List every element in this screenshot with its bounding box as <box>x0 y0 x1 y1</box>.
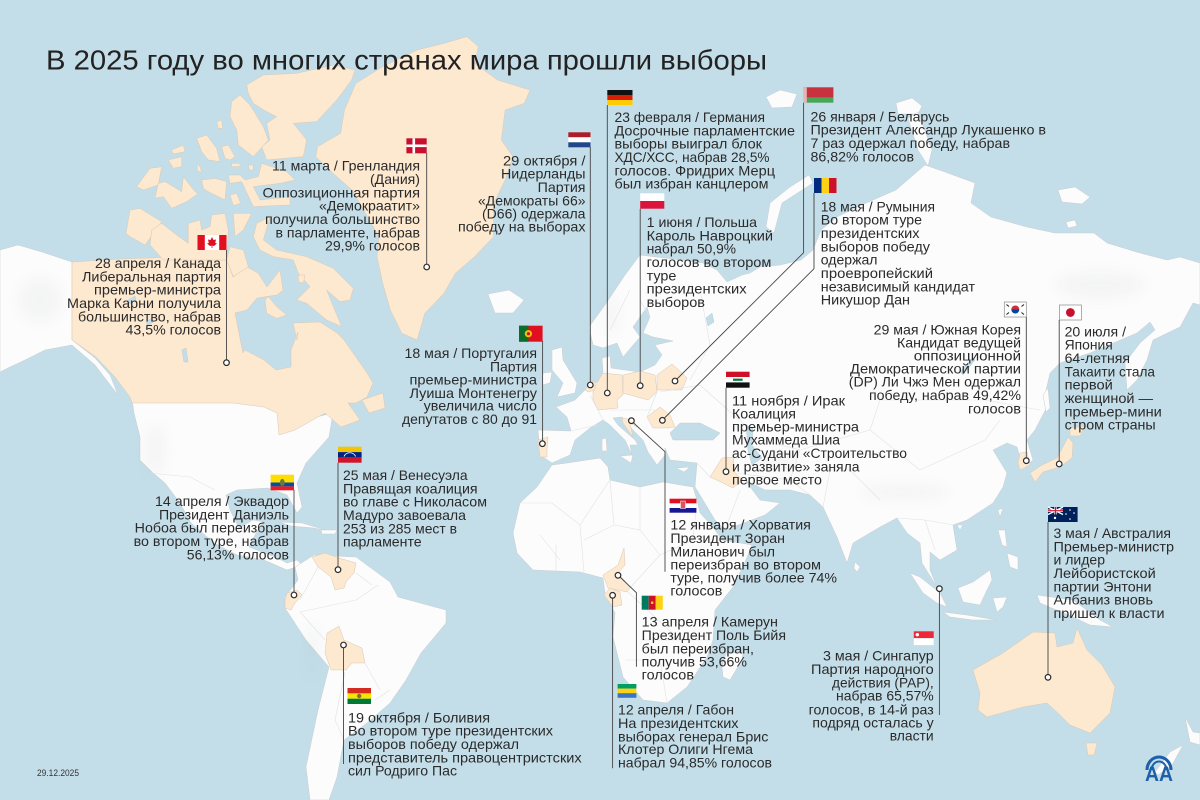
highlight: Netherlands <box>585 382 595 392</box>
callout: Croatia <box>629 418 837 599</box>
text: получив 53,66% <box>642 653 747 669</box>
text <box>614 109 795 192</box>
callout: South Korea <box>849 302 1029 464</box>
callout: Ecuador <box>134 475 297 598</box>
flag: Germany <box>607 90 632 105</box>
leader line <box>293 490 295 592</box>
leader line <box>606 105 608 390</box>
text: во главе с Николасом <box>343 494 487 510</box>
highlight: Japan <box>1030 426 1085 482</box>
highlight: Australia <box>973 628 1115 733</box>
text: На президентских <box>618 715 738 731</box>
leader line <box>938 592 940 715</box>
flag: Singapore <box>914 631 934 645</box>
flag: Belarus <box>804 87 833 103</box>
text <box>67 255 221 338</box>
marker <box>540 441 545 447</box>
text: женщиной — <box>1065 390 1153 406</box>
text: голосов <box>642 666 694 682</box>
text: Правящая коалиция <box>343 480 478 496</box>
text: Либеральная партия <box>82 268 221 284</box>
flag: Bolivia <box>348 688 371 704</box>
text: депутатов с 80 до 91 <box>402 411 537 427</box>
text: Во втором туре президентских <box>348 723 553 739</box>
text: 11 ноября / Ирак <box>732 392 846 408</box>
text <box>809 648 934 743</box>
highlight: Germany <box>593 373 623 410</box>
flag: Ecuador <box>271 475 294 490</box>
text: увеличила число <box>424 398 537 414</box>
text: Кандидат ведущей <box>897 335 1021 351</box>
text: 43,5% голосов <box>126 322 221 338</box>
marker <box>1024 458 1029 464</box>
title: В 2025 году во многих странах мира прошли выборы <box>46 44 767 76</box>
highlight: Iraq <box>710 457 743 488</box>
text: (DP) Ли Чжэ Мен одержал <box>849 374 1021 390</box>
text: большинство, набрав <box>78 308 221 324</box>
text: премьер-министра <box>732 418 859 434</box>
text: 12 января / Хорватия <box>670 517 811 533</box>
text: пришел к власти <box>1054 605 1164 621</box>
text: «Демократы 66» <box>478 192 586 208</box>
callout: Bolivia <box>341 642 582 779</box>
text: первой <box>1065 377 1113 393</box>
text: Миланович был <box>670 543 775 559</box>
text: Президент Даниэль <box>159 506 289 522</box>
text: 3 мая / Сингапур <box>823 648 934 664</box>
text: 1 июня / Польша <box>647 214 757 230</box>
text <box>670 517 837 599</box>
leader line <box>612 598 614 768</box>
text: 3 мая / Австралия <box>1054 525 1171 541</box>
marker <box>335 567 341 572</box>
marker <box>604 390 610 396</box>
text: Досрочные парламентские <box>614 122 795 138</box>
flag: Canada <box>198 235 226 250</box>
leader line <box>337 463 339 567</box>
text: власти <box>890 727 934 743</box>
text: и развитие» заняла <box>732 458 860 474</box>
text: голосов. Фридрих Мерц <box>614 162 775 178</box>
marker <box>341 642 346 648</box>
text: 20 июля / <box>1065 323 1126 339</box>
text: 25 мая / Венесуэла <box>343 467 468 483</box>
callout: Germany <box>604 90 795 396</box>
text: Кароль Навроцкий <box>647 227 773 243</box>
text: парламенте <box>343 533 422 549</box>
leader line <box>1047 522 1049 674</box>
text: Япония <box>1065 337 1113 353</box>
text: 86,82% голосов <box>810 148 914 164</box>
flag: Poland <box>640 193 664 209</box>
marker <box>615 572 621 578</box>
flag: Venezuela <box>338 447 362 463</box>
text: набрал 94,85% голосов <box>618 754 772 770</box>
flag: Netherlands <box>568 132 590 147</box>
text: независимый кандидат <box>821 278 976 294</box>
text: первое место <box>732 472 822 488</box>
text: набрал 50,9% <box>647 241 736 257</box>
marker <box>672 378 678 384</box>
leader line <box>620 577 636 667</box>
flag: Australia <box>1048 507 1078 522</box>
highlight: Cameroon <box>603 548 630 592</box>
text: 23 февраля / Германия <box>614 109 765 125</box>
text: 19 октября / Боливия <box>348 709 490 725</box>
highlight: Croatia <box>622 418 637 437</box>
text: голосов <box>968 400 1021 416</box>
text: Оппозиционная партия <box>262 184 420 200</box>
leader line <box>725 388 727 469</box>
text: действия (PAP), <box>832 674 934 690</box>
marker <box>637 383 643 389</box>
text: набрав 65,57% <box>836 688 934 704</box>
leader line <box>542 341 544 441</box>
text: ас-Судани «Строительство <box>732 445 907 461</box>
text: победу на выборах <box>458 218 586 234</box>
text: премьер-министра <box>410 372 537 388</box>
text: Марка Карни получила <box>67 295 221 311</box>
text: Премьер-министр <box>1054 538 1174 554</box>
text: 29 октября / <box>503 152 586 168</box>
land: Eurasia <box>538 165 1200 587</box>
flag: Portugal <box>519 326 543 342</box>
text: переизбран во втором <box>670 557 821 573</box>
text: 18 мая / Румыния <box>821 199 935 215</box>
text: Партия <box>490 358 537 374</box>
text: туре, получив более 74% <box>670 570 837 586</box>
text <box>1065 323 1162 433</box>
callout: Australia <box>1045 507 1174 680</box>
inland seas <box>670 313 975 465</box>
callout: Singapore <box>809 586 942 743</box>
flag: Iraq <box>726 372 750 388</box>
land: Caribbean islands <box>279 522 337 534</box>
leader line <box>1025 317 1027 458</box>
Canadian lakes <box>128 296 188 362</box>
text: голосов во втором <box>647 254 771 270</box>
marker <box>224 360 229 366</box>
callout: Gabon <box>610 592 772 770</box>
callout: Iraq <box>723 372 907 488</box>
text: стром страны <box>1065 417 1156 433</box>
text <box>134 493 289 562</box>
text: премьер-мини <box>1065 403 1162 419</box>
text: туре <box>647 267 677 283</box>
land: USA and Mexico <box>132 400 333 570</box>
highlight: Greenland <box>316 37 530 340</box>
text <box>849 321 1021 416</box>
text <box>618 702 772 770</box>
text: выборов победу <box>821 238 930 254</box>
text: Мадуро завоевала <box>343 507 466 523</box>
highlight: Belarus <box>657 364 687 390</box>
text: Президент Зоран <box>670 530 785 546</box>
callout: Japan <box>1056 305 1162 467</box>
text: выборах генерал Брис <box>618 728 768 744</box>
callout: Canada <box>67 235 229 366</box>
text <box>262 158 420 254</box>
highlight: Tasmania <box>1086 743 1097 755</box>
date: 29.12.2025 <box>37 768 79 778</box>
Newfoundland <box>362 393 385 413</box>
text: президентских <box>647 281 747 297</box>
text: 18 мая / Португалия <box>404 345 537 361</box>
leader line <box>664 193 814 418</box>
text: «Демокраатит» <box>319 198 420 214</box>
callout: Portugal <box>402 326 545 447</box>
text: одержал <box>821 252 878 268</box>
flag: Denmark <box>406 138 427 153</box>
marker <box>1056 461 1062 467</box>
text: выборы выиграл блок <box>614 136 763 152</box>
Canada mainland <box>72 257 373 435</box>
land: Alaska <box>0 245 118 395</box>
callout: Greenland (Denmark) <box>262 138 430 270</box>
text: президентских <box>821 225 920 241</box>
land: Scandinavia and island details <box>488 90 1090 472</box>
marker <box>629 418 634 424</box>
text <box>642 614 786 682</box>
text: 12 апреля / Габон <box>618 702 734 718</box>
text: Никушор Дан <box>821 292 910 308</box>
callout: Poland <box>637 193 773 389</box>
text: (Дания) <box>370 171 420 187</box>
text: Такаити стала <box>1065 363 1155 379</box>
text: выборов победу одержал <box>348 736 519 752</box>
text: Демократической партии <box>850 360 1021 376</box>
marker <box>937 586 942 592</box>
leader line <box>342 648 344 764</box>
text: 13 апреля / Камерун <box>642 614 778 630</box>
callout: Belarus <box>672 87 1046 384</box>
text: Президент Александр Лукашенко в <box>810 122 1046 138</box>
text: 56,13% голосов <box>187 546 289 562</box>
leader line <box>589 147 591 382</box>
text: 253 из 285 мест в <box>343 520 457 536</box>
highlight: Romania <box>647 407 675 428</box>
text <box>458 152 586 234</box>
text: 26 января / Беларусь <box>810 108 949 124</box>
text <box>732 392 907 488</box>
highlight: Gabon <box>604 588 622 607</box>
text: выборов <box>647 294 705 310</box>
Canadian Arctic islands <box>126 65 355 327</box>
leader line <box>633 423 665 572</box>
text: Во втором туре <box>821 212 922 228</box>
text: Клотер Олиги Нгема <box>618 741 753 757</box>
flag: Romania <box>814 178 836 193</box>
text: сил Родриго Пас <box>348 763 457 779</box>
relief shading <box>18 271 1145 678</box>
text: 29 мая / Южная Корея <box>874 321 1021 337</box>
flag: Japan <box>1059 305 1081 320</box>
marker <box>291 592 297 598</box>
land: South America <box>285 555 446 800</box>
text: Нидерланды <box>501 166 586 182</box>
text <box>343 467 487 549</box>
text: и лидер <box>1054 552 1105 568</box>
marker <box>660 418 665 423</box>
marker <box>1045 674 1051 680</box>
callout: Netherlands <box>458 132 593 388</box>
text: 11 марта / Гренландия <box>272 158 420 174</box>
text: Албаниз вновь <box>1054 592 1153 608</box>
text: 64-летняя <box>1065 350 1130 366</box>
land: Africa <box>513 458 752 703</box>
highlight: Poland <box>623 371 657 400</box>
text: 7 раз одержал победу, набрав <box>810 135 1010 151</box>
text: оппозиционной <box>914 347 1021 363</box>
marker <box>588 382 593 388</box>
text: 14 апреля / Эквадор <box>155 493 289 509</box>
text: проевропейский <box>821 265 933 281</box>
text: 28 апреля / Канада <box>95 255 221 271</box>
leader line <box>226 250 228 360</box>
text: был избран канцлером <box>614 176 768 192</box>
callout: Venezuela <box>335 447 487 572</box>
leader line <box>1058 320 1060 461</box>
marker <box>610 592 615 598</box>
callout: Cameroon <box>615 572 786 682</box>
text: Лейбористской <box>1054 565 1156 581</box>
text: Партия народного <box>811 661 934 677</box>
text: голосов <box>670 583 722 599</box>
callout: Romania <box>660 178 976 423</box>
highlighted countries <box>72 37 1115 755</box>
marker <box>723 469 729 475</box>
highlight: Portugal <box>538 437 548 457</box>
text: во втором туре, набрав <box>134 533 289 549</box>
text: Мухаммеда Шиа <box>732 432 840 448</box>
text: Нобоа был переизбран <box>135 520 289 536</box>
text: представитель правоцентристских <box>348 749 582 765</box>
text <box>821 199 976 308</box>
leader line <box>639 209 641 383</box>
highlight: Canada <box>72 65 385 435</box>
text: голосов, в 14-й раз <box>809 701 934 717</box>
text: (D66) одержала <box>482 205 586 221</box>
highlight: Bolivia <box>325 626 365 670</box>
text: был переизбран, <box>642 640 754 656</box>
text: Президент Поль Бийя <box>642 627 786 643</box>
text: победу, набрав 49,42% <box>869 387 1021 403</box>
flag: South Korea <box>1004 302 1026 317</box>
text: партии Энтони <box>1054 578 1152 594</box>
text: ХДС/ХСС, набрав 28,5% <box>614 149 770 165</box>
land: Southeast Asia and Pacific islands <box>722 508 1200 775</box>
flag: Gabon <box>618 684 636 698</box>
text <box>1054 525 1174 621</box>
text <box>647 214 773 310</box>
highlight: Venezuela <box>312 553 356 590</box>
marker <box>424 264 430 270</box>
text <box>348 709 582 779</box>
text: Луиша Монтенегру <box>410 385 537 401</box>
logo: Anadolu Agency: AA <box>1145 763 1173 786</box>
text: премьер-министра <box>94 282 221 298</box>
flag: Cameroon <box>642 596 663 610</box>
text: в парламенте, набрав <box>276 224 420 240</box>
text <box>810 108 1046 164</box>
leader line <box>677 103 804 379</box>
text: Партия <box>538 179 586 195</box>
country borders <box>150 290 1040 740</box>
text: получила большинство <box>265 211 420 227</box>
text: 29,9% голосов <box>325 238 420 254</box>
highlight: Ecuador <box>285 590 302 610</box>
leader line <box>426 153 428 264</box>
text <box>402 345 537 427</box>
text: подряд осталась у <box>812 715 934 731</box>
text: Коалиция <box>732 406 796 422</box>
flag: Croatia <box>670 499 696 513</box>
highlight: South Korea <box>1018 452 1030 470</box>
